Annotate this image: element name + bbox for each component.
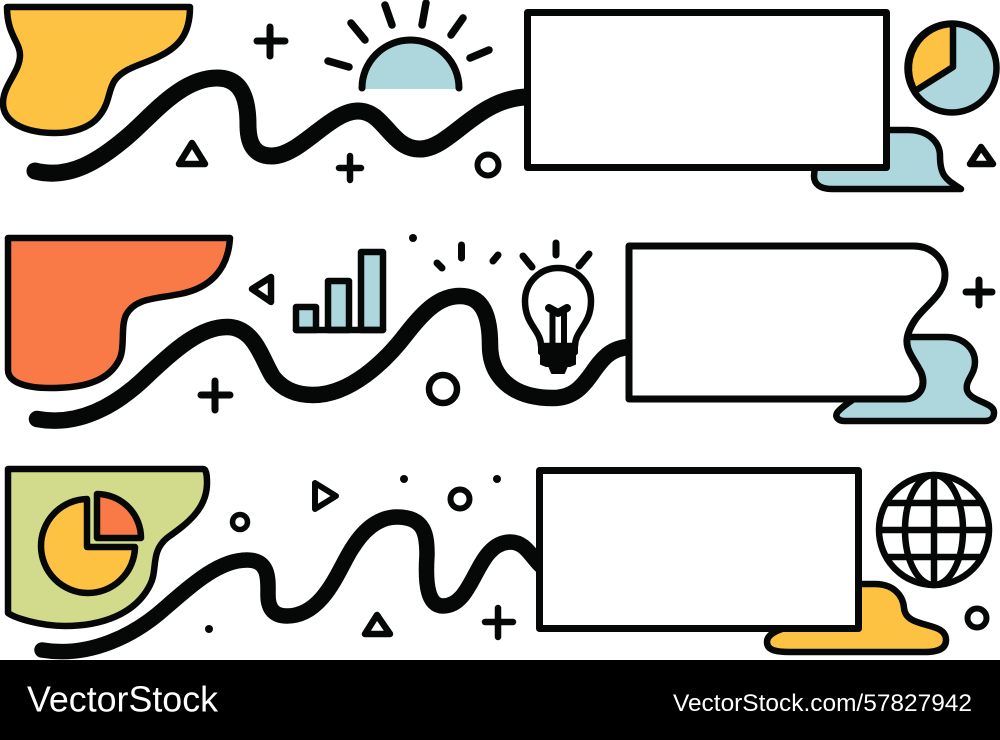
panel: banner 3: [8, 469, 989, 652]
text box 2: [629, 246, 945, 399]
icon: pie chart 1: [908, 24, 996, 112]
icon: rising sun: [328, 3, 489, 89]
icon: plus: [201, 381, 230, 410]
ribbon: wavy connector 1: [35, 78, 525, 173]
icon: ring: [429, 375, 457, 403]
icon: ring small: [232, 514, 248, 530]
icon: exploded pie chart: [41, 494, 141, 593]
icon: triangle right: [970, 147, 993, 164]
icon: ring: [478, 154, 498, 176]
icon: plus: [485, 608, 513, 637]
panel: banner 2: [8, 234, 994, 421]
blob: yellow puddle: [767, 584, 946, 652]
icon: globe: [879, 475, 989, 585]
blob: green header shape: [8, 469, 207, 626]
blob: blue puddle 1: [814, 130, 961, 189]
panel: banner 1: [3, 3, 996, 189]
footer bar: [0, 660, 1000, 740]
text box 1: [528, 12, 886, 168]
ribbon: wavy connector 2: [37, 296, 630, 421]
icon: plus small: [339, 156, 361, 180]
icon: light bulb: [523, 243, 591, 373]
blob: yellow header shape: [3, 7, 190, 133]
sparks above ribbon: [409, 234, 498, 268]
footer url text: VectorStock.com/57827942: [673, 690, 972, 717]
footer logo text: VectorStock: [27, 678, 219, 720]
icon: right triangle: [315, 483, 336, 509]
dots: [205, 475, 501, 633]
ribbon: wavy connector 3: [42, 517, 540, 652]
icon: plus right: [966, 280, 992, 305]
icon: ring: [450, 490, 470, 508]
blob: blue puddle 2: [836, 337, 994, 421]
icon: triangle: [179, 143, 205, 164]
icon: left triangle: [252, 277, 271, 302]
icon: ring right: [968, 608, 986, 628]
text box 3: [540, 470, 858, 628]
icon: triangle: [365, 615, 390, 634]
icon: bar chart: [296, 252, 383, 330]
icon: plus: [257, 27, 285, 56]
blob: orange header shape: [8, 238, 230, 388]
